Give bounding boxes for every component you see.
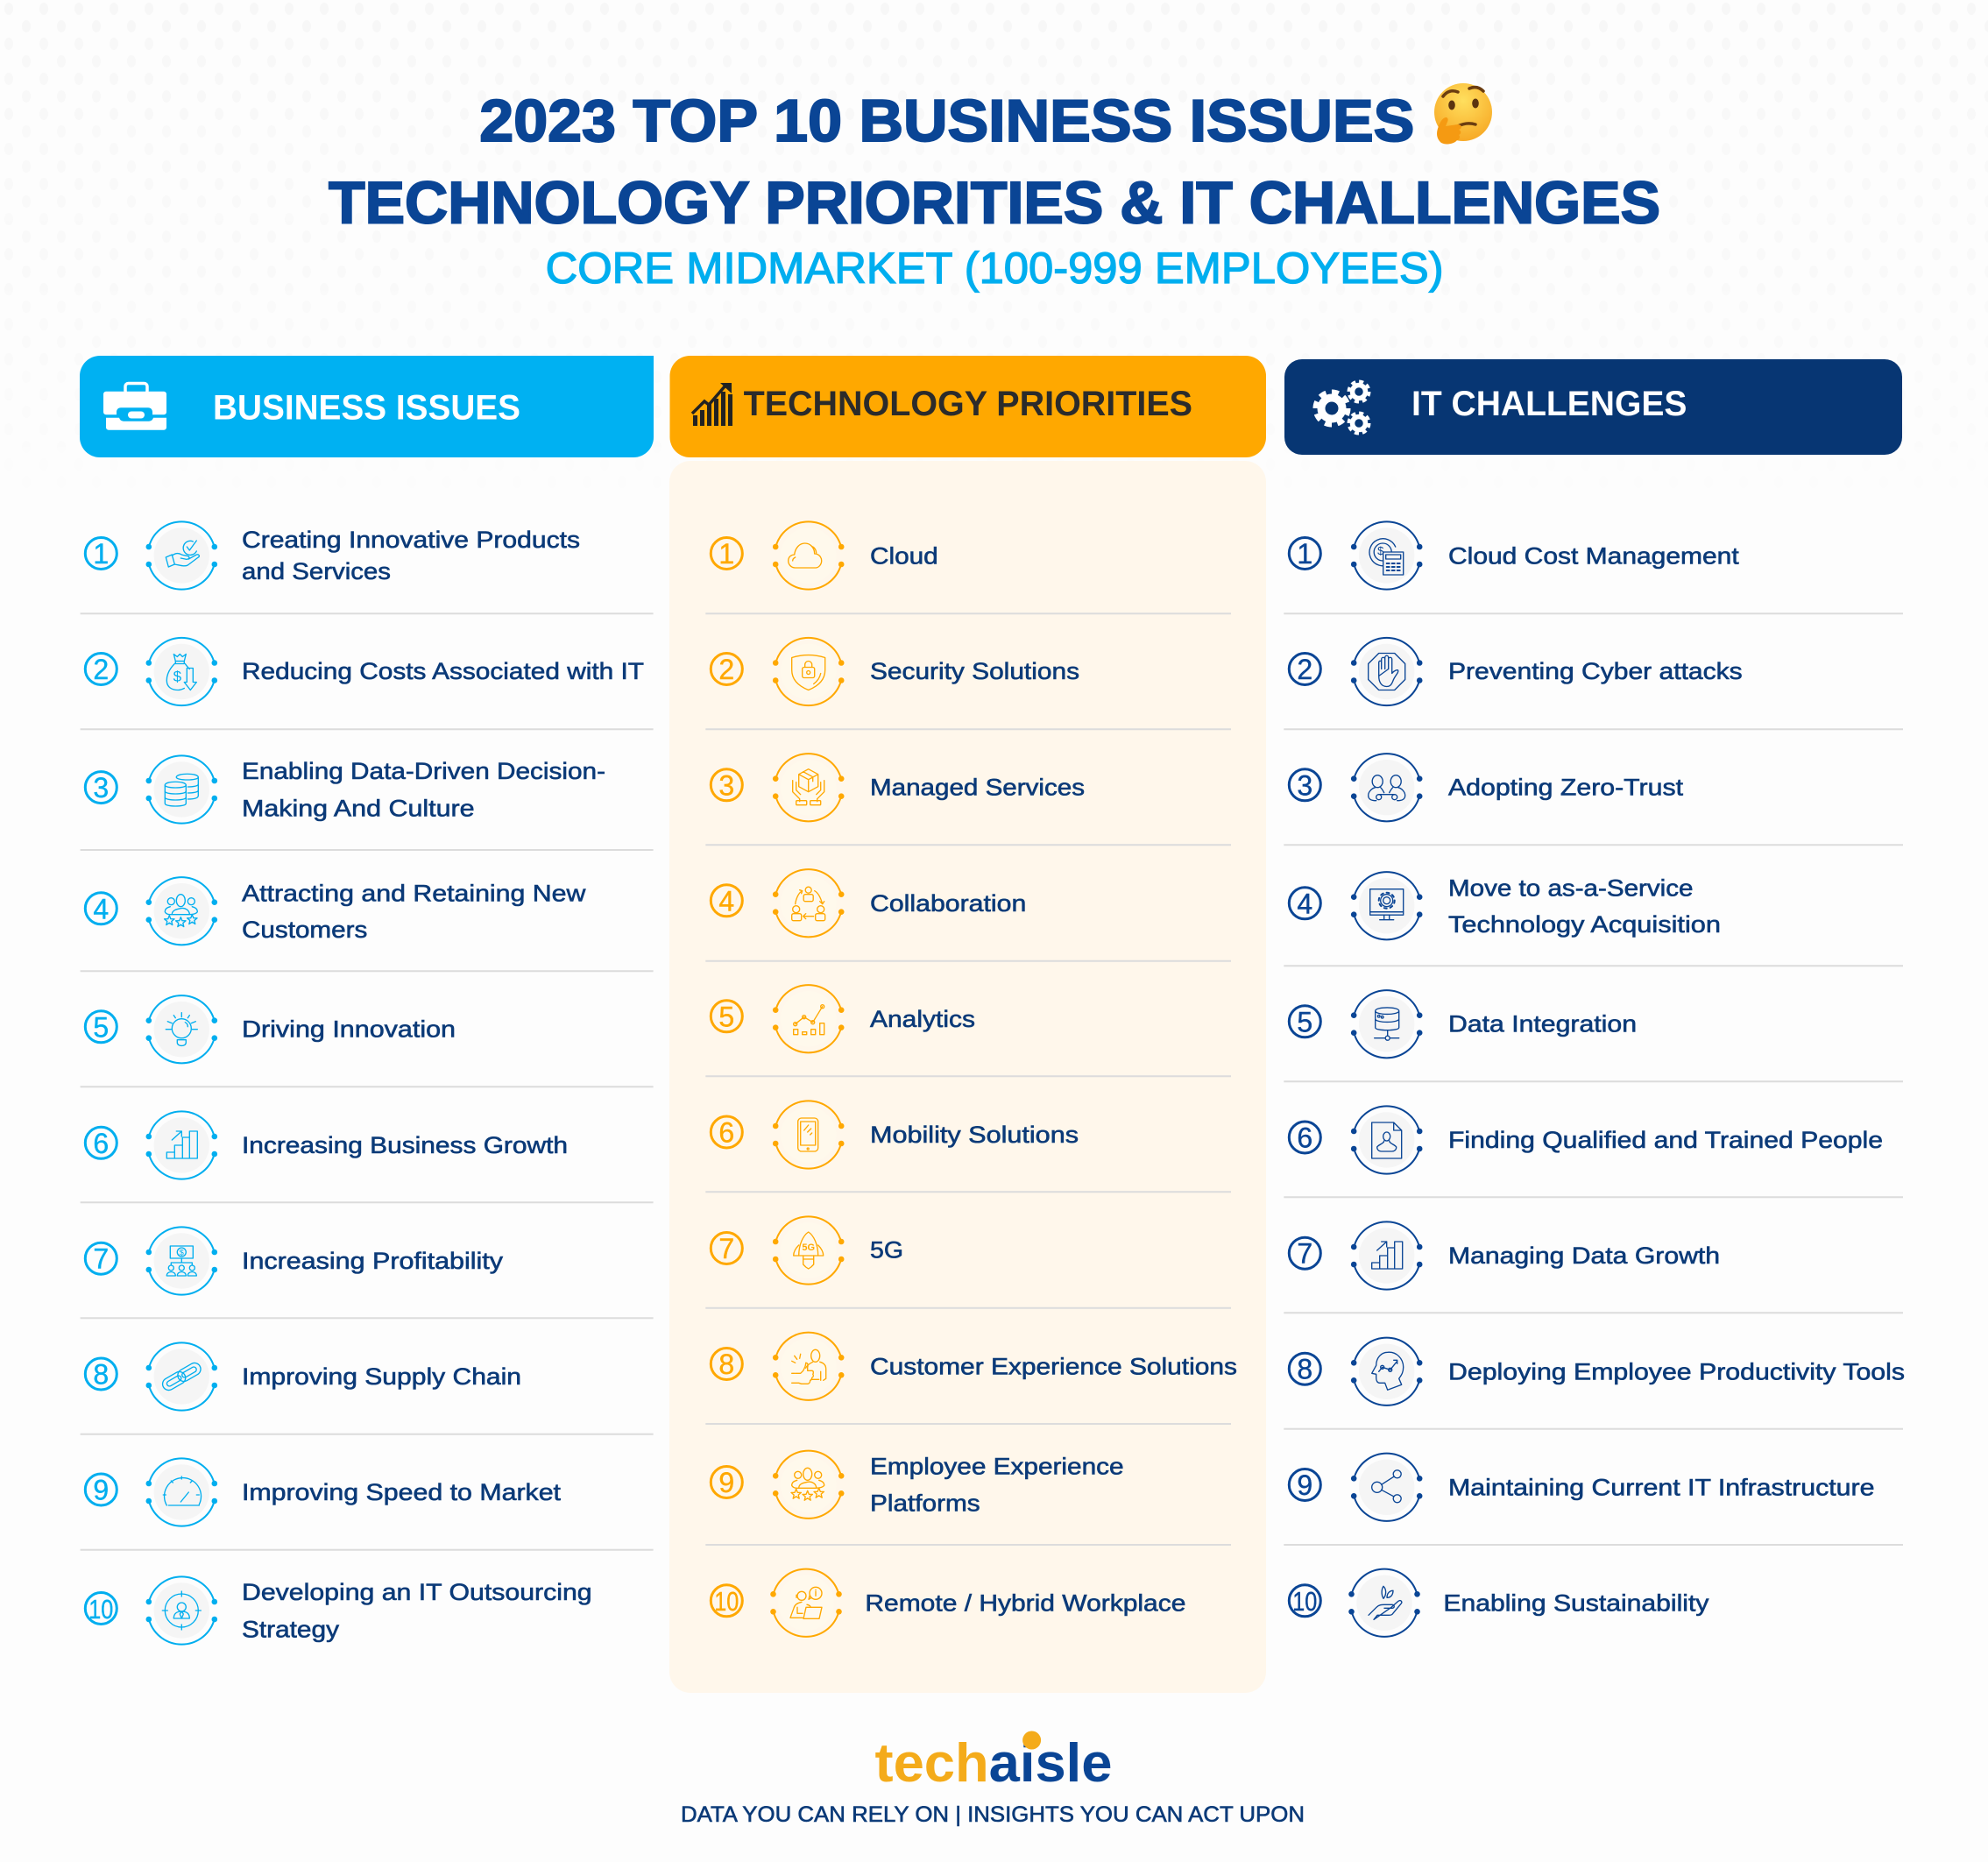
number 4: 4	[718, 885, 734, 917]
column: business issues list	[85, 521, 644, 1645]
text: Security Solutions	[870, 658, 1079, 684]
number 6	[711, 1116, 742, 1148]
text: Deploying Employee Productivity Tools	[1448, 1358, 1905, 1384]
number 6	[85, 1127, 117, 1159]
text	[870, 1454, 1124, 1516]
text: 5G	[870, 1237, 903, 1264]
row 4: collaboration	[711, 869, 1026, 937]
text: Improving Supply Chain	[242, 1363, 521, 1390]
title: 2023 TOP 10 BUSINESS ISSUES	[479, 88, 1414, 154]
icon: hand with plant	[1348, 1569, 1420, 1637]
icon: share nodes	[1351, 1454, 1423, 1521]
text: Remote / Hybrid Workplace	[865, 1589, 1185, 1616]
number 3: 3	[93, 772, 109, 804]
text: Cloud Cost Management	[1448, 542, 1739, 569]
number 3	[85, 772, 117, 804]
text: Making And Culture	[242, 796, 475, 822]
number 9	[711, 1467, 742, 1498]
row 9: speed to market	[85, 1458, 562, 1526]
tagline: DATA YOU CAN RELY ON | INSIGHTS YOU CAN ACT UPON	[681, 1802, 1305, 1827]
logo: techaisle: techaisle	[874, 1733, 1113, 1794]
number 1: 1	[1297, 538, 1312, 570]
icon: speedometer	[145, 1458, 217, 1526]
text: and Services	[242, 558, 391, 584]
number 5: 5	[93, 1011, 109, 1043]
text: Increasing Profitability	[242, 1248, 504, 1274]
icon: coin stacks	[145, 755, 217, 824]
icon: line and bar chart	[773, 985, 845, 1052]
number 8	[1289, 1353, 1320, 1385]
number 5	[711, 1001, 742, 1032]
number 2: 2	[93, 654, 109, 685]
row 8: customer experience	[711, 1333, 1237, 1400]
row 10: remote work	[711, 1569, 1185, 1637]
text: Mobility Solutions	[870, 1122, 1079, 1148]
number 10: 10	[714, 1586, 739, 1617]
text: Preventing Cyber attacks	[1448, 658, 1743, 684]
text	[1448, 874, 1721, 938]
number 4: 4	[93, 893, 109, 924]
text: Creating Innovative Products	[242, 527, 580, 553]
row 3: data-driven decisions	[85, 755, 605, 824]
number 8: 8	[93, 1358, 109, 1390]
icon: head with graph	[1351, 1338, 1423, 1405]
title	[329, 88, 1660, 237]
number 4	[711, 885, 742, 917]
icon: thinking face emoji	[1434, 83, 1492, 144]
icon: monitor with gear	[1351, 872, 1423, 939]
icon: gears	[1316, 382, 1369, 433]
row 7: profitability	[85, 1227, 504, 1295]
text: Developing an IT Outsourcing	[242, 1579, 592, 1605]
icon: banknote over org chart	[145, 1227, 217, 1295]
row 10: it outsourcing	[85, 1576, 592, 1645]
icon: stop hand	[1351, 638, 1423, 705]
icon: briefcase	[103, 384, 166, 430]
number 9	[1289, 1469, 1320, 1501]
text: Maintaining Current IT Infrastructure	[1448, 1475, 1875, 1501]
text: Adopting Zero-Trust	[1448, 774, 1684, 800]
row 6: qualified people	[1289, 1106, 1883, 1174]
row 7: managing data growth	[1289, 1221, 1720, 1290]
number 2: 2	[718, 654, 734, 685]
text	[242, 758, 605, 822]
row 2: reducing costs	[85, 638, 644, 705]
column: it challenges list	[1289, 521, 1905, 1637]
row 6: mobility	[711, 1101, 1079, 1169]
number 5: 5	[1297, 1006, 1312, 1037]
icon: 5G rocket	[773, 1216, 845, 1285]
number 6	[1289, 1122, 1320, 1153]
panel: technology priorities background	[669, 461, 1266, 1693]
row 7: 5G	[711, 1216, 903, 1285]
icon: team with stars	[145, 877, 217, 945]
row 9: maintaining infrastructure	[1289, 1454, 1875, 1521]
number 7: 7	[93, 1243, 109, 1275]
header: technology priorities	[669, 356, 1266, 457]
number 7	[711, 1232, 742, 1264]
row 5: data integration	[1289, 990, 1637, 1058]
number 1: 1	[718, 538, 734, 570]
row 3: managed services	[711, 754, 1085, 821]
text: Customer Experience Solutions	[870, 1354, 1237, 1380]
number 6: 6	[1297, 1122, 1312, 1153]
number 3: 3	[718, 769, 734, 801]
number 1	[1289, 538, 1320, 570]
text: Enabling Data-Driven Decision-	[242, 758, 605, 784]
text	[242, 527, 580, 584]
row 10: sustainability	[1289, 1569, 1709, 1637]
icon: team with stars	[773, 1451, 845, 1519]
number 10: 10	[88, 1594, 113, 1625]
header: business issues: BUSINESS ISSUES	[213, 389, 520, 428]
number 4: 4	[1297, 888, 1312, 919]
number 2	[711, 654, 742, 685]
row 5: driving innovation	[85, 995, 456, 1063]
number 9: 9	[1297, 1469, 1312, 1501]
icon: remote worker with laptop	[770, 1569, 842, 1637]
header: it challenges: IT CHALLENGES	[1411, 385, 1687, 423]
icon: banknote over org chart: $	[180, 1248, 184, 1257]
text: Move to as-a-Service	[1448, 874, 1693, 901]
icon: two people exchange	[1351, 754, 1423, 821]
text: Technology Acquisition	[1448, 911, 1721, 938]
icon: rising bar chart	[692, 383, 732, 426]
text: Analytics	[870, 1006, 975, 1032]
icon: smartphone	[773, 1101, 845, 1169]
icon: shield lock	[773, 638, 845, 705]
number 3: 3	[1297, 769, 1312, 801]
number 9	[85, 1474, 117, 1505]
icon: light bulb	[145, 995, 217, 1063]
number 6: 6	[93, 1128, 109, 1159]
number 4	[1289, 888, 1320, 919]
row 4: as-a-service	[1289, 872, 1721, 939]
number 2	[85, 654, 117, 685]
row 5: analytics	[711, 985, 975, 1052]
text: Driving Innovation	[242, 1016, 456, 1042]
row 4: attracting customers	[85, 877, 586, 945]
icon: target with person	[145, 1576, 217, 1645]
number 9: 9	[93, 1474, 109, 1505]
icon: hand with check	[145, 521, 217, 590]
text: Improving Speed to Market	[242, 1479, 562, 1505]
text: Platforms	[870, 1490, 980, 1516]
title: TECHNOLOGY PRIORITIES & IT CHALLENGES	[329, 170, 1660, 237]
number 5	[1289, 1006, 1320, 1037]
text	[242, 880, 586, 943]
number 1	[85, 538, 117, 570]
icon: money bag with down arrow: $	[173, 668, 182, 685]
text: Employee Experience	[870, 1454, 1124, 1480]
row 2: security	[711, 638, 1079, 705]
header: business issues	[80, 356, 654, 457]
number 7: 7	[718, 1233, 734, 1264]
text: Collaboration	[870, 890, 1026, 917]
number 1	[711, 538, 742, 570]
icon: cloud	[773, 521, 845, 590]
number 4	[85, 893, 117, 924]
number 10: 10	[1292, 1586, 1317, 1617]
icon: document with person	[1351, 1106, 1423, 1174]
text: Data Integration	[1448, 1011, 1637, 1037]
number 5	[85, 1011, 117, 1043]
icon: database node	[1351, 990, 1423, 1058]
row 9: employee experience	[711, 1451, 1124, 1519]
text: Increasing Business Growth	[242, 1132, 568, 1158]
icon: box in hands	[773, 754, 845, 821]
icon: coin and calculator: $	[1377, 544, 1384, 557]
icon: growth bars	[145, 1111, 217, 1179]
text: Enabling Sustainability	[1443, 1589, 1709, 1616]
row 3: adopting zero-trust	[1289, 754, 1684, 821]
icon: thumbs up with person	[773, 1333, 845, 1400]
number 8: 8	[718, 1349, 734, 1380]
dividers	[81, 613, 1903, 1550]
header: it challenges	[1284, 359, 1902, 455]
number 8: 8	[1297, 1354, 1312, 1385]
text: Customers	[242, 917, 367, 943]
number 5: 5	[718, 1001, 734, 1032]
row 1: creating innovative products	[85, 521, 580, 590]
icon: 5G rocket: 5G	[802, 1243, 815, 1253]
row 8: productivity tools	[1289, 1338, 1905, 1405]
text: Attracting and Retaining New	[242, 880, 586, 906]
number 6: 6	[718, 1116, 734, 1148]
column: technology priorities list	[711, 521, 1237, 1637]
text	[242, 1579, 592, 1642]
text: Reducing Costs Associated with IT	[242, 658, 644, 684]
icon: chain links	[145, 1342, 217, 1411]
icon: growth bars	[1351, 1221, 1423, 1290]
subtitle: CORE MIDMARKET (100-999 EMPLOYEES)	[546, 244, 1444, 293]
row 1: cloud cost management	[1289, 521, 1739, 590]
text: Finding Qualified and Trained People	[1448, 1127, 1883, 1153]
number 2: 2	[1297, 654, 1312, 685]
text: Managed Services	[870, 774, 1085, 800]
number 8	[85, 1358, 117, 1390]
row 8: supply chain	[85, 1342, 521, 1411]
icon: money bag with down arrow	[145, 638, 217, 705]
text: Cloud	[870, 542, 938, 569]
number 3	[1289, 769, 1320, 801]
number 3	[711, 769, 742, 801]
number 9: 9	[718, 1467, 734, 1498]
row 2: preventing cyber attacks	[1289, 638, 1743, 705]
text: Strategy	[242, 1616, 340, 1642]
icon: coin and calculator	[1351, 521, 1423, 590]
number 1: 1	[93, 538, 109, 570]
icon: three people with arrows	[773, 869, 845, 937]
number 7: 7	[1297, 1238, 1312, 1270]
text: Managing Data Growth	[1448, 1243, 1720, 1269]
row 1: cloud	[711, 521, 938, 590]
row 6: business growth	[85, 1111, 568, 1179]
number 7	[85, 1243, 117, 1275]
number 2	[1289, 654, 1320, 685]
number 7	[1289, 1237, 1320, 1270]
number 8	[711, 1348, 742, 1380]
header: technology priorities: TECHNOLOGY PRIORITIES	[744, 385, 1192, 423]
